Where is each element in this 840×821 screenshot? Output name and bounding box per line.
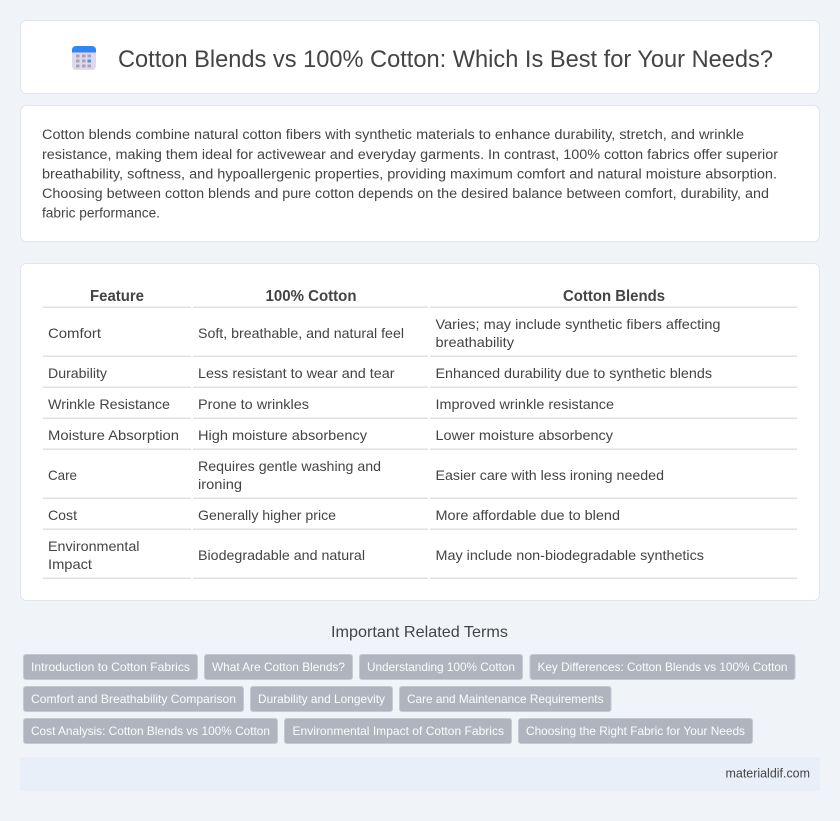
tag: Care and Maintenance Requirements <box>407 692 604 706</box>
row: comfort: Comfort <box>48 325 101 341</box>
footer <box>20 757 820 791</box>
panel: introduction text: breathability, softness, and hypoallergenic properties, providing maximum comfort and natural moisture absorption. <box>42 166 777 182</box>
row: comfort <box>48 316 720 350</box>
row: care <box>48 458 664 492</box>
row: environmental impact: Impact <box>48 556 92 572</box>
row: moisture absorption: Lower moisture absorbency <box>436 427 613 443</box>
row: moisture absorption: High moisture absorbency <box>198 427 367 443</box>
tag: Comfort and Breathability Comparison <box>31 692 236 706</box>
related term tags <box>24 654 795 744</box>
tag <box>360 654 522 680</box>
row: durability: Less resistant to wear and tear <box>198 365 395 381</box>
panel: introduction text: Choosing between cotton blends and pure cotton depends on the desired balance between comfort, durability, and <box>42 186 769 202</box>
row: moisture absorption: Moisture Absorption <box>48 427 179 443</box>
row: comfort: breathability <box>436 334 514 350</box>
row: moisture absorption <box>48 427 613 443</box>
row: wrinkle resistance <box>48 396 614 412</box>
tag: Key Differences: Cotton Blends vs 100% Cotton <box>538 660 788 674</box>
tag <box>204 654 352 680</box>
row: cost <box>48 507 620 523</box>
table header: Cotton Blends <box>563 288 665 305</box>
row: comfort: Varies; may include synthetic fibers affecting <box>436 316 720 332</box>
row: cost: Generally higher price <box>198 507 336 523</box>
tag: Environmental Impact of Cotton Fabrics <box>292 724 504 738</box>
tag: Choosing the Right Fabric for Your Needs <box>526 724 745 738</box>
tag: What Are Cotton Blends? <box>212 660 345 674</box>
tag <box>400 686 611 712</box>
row: care: Care <box>48 467 77 483</box>
table header <box>90 288 665 305</box>
panel: comparison table <box>20 264 820 600</box>
row: comfort: Soft, breathable, and natural feel <box>198 325 404 341</box>
tag: Cost Analysis: Cotton Blends vs 100% Cotton <box>31 724 270 738</box>
icon: calendar <box>72 46 96 70</box>
row: durability <box>48 365 712 381</box>
row: durability: Durability <box>48 365 107 381</box>
tag <box>250 686 392 712</box>
row: care: Requires gentle washing and <box>198 458 381 474</box>
row: wrinkle resistance: Prone to wrinkles <box>198 396 309 412</box>
footer: materialdif.com <box>726 766 810 780</box>
row: cost: Cost <box>48 507 77 523</box>
tag: Introduction to Cotton Fabrics <box>31 660 190 674</box>
row: care: Easier care with less ironing needed <box>436 467 664 483</box>
panel: introduction text <box>20 106 820 242</box>
tag <box>24 718 278 744</box>
row: environmental impact: Biodegradable and natural <box>198 547 365 563</box>
tag: Understanding 100% Cotton <box>367 660 515 674</box>
panel: introduction text: resistance, making them ideal for activewear and everyday garments. In contrast, 100% cotton fabrics offer superior <box>42 147 778 163</box>
row: environmental impact: Environmental <box>48 538 140 554</box>
panel: introduction text: Cotton blends combine natural cotton fibers with synthetic materials to enhance durability, stretch, and wrinkle <box>42 127 744 143</box>
tag <box>24 654 198 680</box>
tag <box>24 686 244 712</box>
table header: 100% Cotton <box>266 288 356 305</box>
row: environmental impact <box>48 538 704 572</box>
row: care: ironing <box>198 476 242 492</box>
heading: important related terms: Important Related Terms <box>331 624 508 641</box>
row: durability: Enhanced durability due to synthetic blends <box>436 365 712 381</box>
row: wrinkle resistance: Wrinkle Resistance <box>48 396 170 412</box>
row: environmental impact: May include non-biodegradable synthetics <box>436 547 704 563</box>
table header: Feature <box>90 288 144 305</box>
title: Cotton Blends vs 100% Cotton: Which Is Best for Your Needs? <box>118 46 773 73</box>
panel: introduction text: fabric performance. <box>42 206 160 222</box>
tag <box>530 654 795 680</box>
tag: Durability and Longevity <box>258 692 385 706</box>
row: wrinkle resistance: Improved wrinkle resistance <box>436 396 614 412</box>
tag <box>284 718 512 744</box>
header panel <box>20 20 820 94</box>
tag <box>518 718 752 744</box>
row: cost: More affordable due to blend <box>436 507 620 523</box>
